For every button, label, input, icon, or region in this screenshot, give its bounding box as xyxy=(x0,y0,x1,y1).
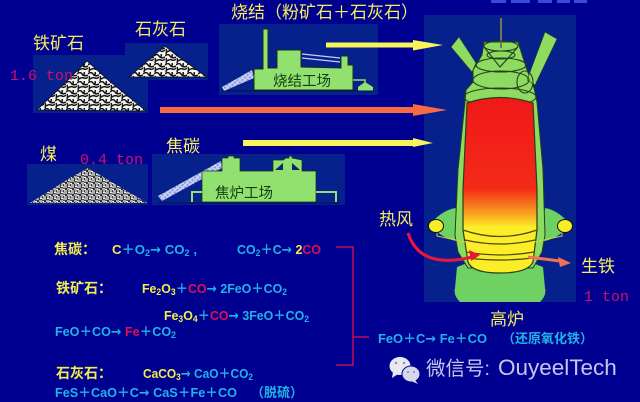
formula: CaCO3: CaO＋CO xyxy=(194,366,254,381)
formula: CO2 + C: 2 xyxy=(256,248,260,258)
left chute xyxy=(451,37,476,72)
heading: limestone reactions: 石灰石： xyxy=(56,365,112,381)
formula: FeO + CO: 2 xyxy=(171,330,176,340)
formula: CaCO3: CaCO xyxy=(143,366,176,381)
formula: CO2 + C: CO xyxy=(237,242,256,257)
bracket connector xyxy=(336,247,369,365)
formula: CO2 + C: ＋C xyxy=(260,242,282,257)
watermark text xyxy=(426,355,617,380)
arrow: coke to furnace xyxy=(243,138,433,147)
formula: coke reactions: , xyxy=(190,242,197,257)
bell outlines xyxy=(464,41,536,106)
formula: Fe3O4: Fe xyxy=(164,308,178,323)
formula: coke reactions: 2 xyxy=(145,248,150,258)
arrow: sinter to furnace xyxy=(326,40,443,50)
furnace hot zone gradient xyxy=(463,98,537,273)
label: limestone: 石灰石 xyxy=(135,20,186,39)
formula: CaCO3: 2 xyxy=(248,372,253,382)
icon: sinter plant building xyxy=(254,29,353,90)
label: pig iron: 生铁 xyxy=(581,257,615,276)
formula: desulfurization: FeS＋CaO＋C→ CaS＋Fe＋CO xyxy=(55,385,237,401)
right bustle ring xyxy=(558,220,572,232)
formula: Fe2O3: 2 xyxy=(156,287,161,297)
formula: Fe3O4: 3 xyxy=(178,314,183,324)
formula: Fe3O4: O xyxy=(183,308,193,323)
formula: Fe2O3: CO→ 2FeO＋CO xyxy=(188,281,286,297)
panel: coke plant xyxy=(152,154,345,205)
icon: coal pile xyxy=(30,168,147,203)
furnace shell xyxy=(455,42,545,268)
formula: Fe2O3: O xyxy=(161,281,171,296)
formula: FeO + CO: FeO＋CO→ Fe＋CO xyxy=(55,324,172,340)
furnace base xyxy=(455,262,545,302)
formula: coke reactions: CO xyxy=(165,242,184,257)
formula: Fe2O3: 3 xyxy=(171,287,176,297)
label: iron ore: 铁矿石 xyxy=(33,34,84,53)
watermark text: OuyeelTech xyxy=(498,355,617,380)
panel: coal xyxy=(27,164,148,205)
label: blast furnace: 高炉 xyxy=(490,310,524,329)
right chute xyxy=(527,32,557,85)
arrow: hot air xyxy=(408,233,472,260)
icon: conveyor xyxy=(158,161,222,201)
cropped title fragment xyxy=(491,0,587,3)
formula: Fe2O3: Fe xyxy=(142,281,156,296)
icon: coke plant building xyxy=(202,156,316,202)
charging rod xyxy=(500,18,502,48)
label: hot air: 热风 xyxy=(379,210,413,229)
arrow head: hot air xyxy=(469,250,480,261)
label: 1.6 ton: 1.6 ton xyxy=(10,68,73,85)
panel: blast furnace xyxy=(424,15,576,302)
note: desulfurization: （脱硫） xyxy=(251,385,303,400)
icon: iron ore pile xyxy=(37,61,146,111)
label: coal: 煤 xyxy=(40,145,57,164)
heading: iron ore reactions: 铁矿石： xyxy=(56,280,112,296)
label: 1 ton: 1 ton xyxy=(584,289,629,306)
hot air bustle left xyxy=(432,208,460,242)
watermark text: 微信号: xyxy=(426,358,490,380)
left bustle ring xyxy=(428,220,444,232)
formula: Fe2O3: 2 xyxy=(282,287,287,297)
arrow head: pig iron xyxy=(558,257,571,267)
formula: coke reactions: → xyxy=(150,243,161,258)
formula: Fe3O4: 4 xyxy=(193,314,198,324)
hot air bustle right xyxy=(541,208,568,242)
heading: coke reactions: 焦碳： xyxy=(54,241,96,257)
formula: Fe2O3: ＋ xyxy=(176,281,188,296)
formula: Fe3O4: 2 xyxy=(304,314,309,324)
formula: Fe3O4: CO→ 3FeO＋CO xyxy=(210,308,308,324)
arrow: ore to furnace xyxy=(160,104,447,116)
panel: limestone xyxy=(125,43,208,80)
formula: FeO reduction: FeO＋C→ Fe＋CO xyxy=(378,331,487,347)
hearth bands xyxy=(463,230,537,260)
icon: conveyor xyxy=(222,70,254,91)
panel: iron ore xyxy=(33,55,148,113)
panel: sinter plant xyxy=(219,24,378,95)
label: coke: 焦碳 xyxy=(166,137,200,156)
arrow: pig iron xyxy=(528,257,560,261)
formula: coke reactions: C＋O xyxy=(112,242,145,257)
label: 0.4 ton: 0.4 ton xyxy=(80,152,143,169)
icon: wechat logo xyxy=(390,357,420,384)
label: coke plant: 焦炉工场 xyxy=(215,185,273,202)
formula: coke reactions: 2 xyxy=(185,248,190,258)
formula: CaCO3: 3 xyxy=(176,372,181,382)
icon: limestone pile xyxy=(129,46,207,77)
formula: CO2 + C: → 2CO xyxy=(282,242,322,258)
formula: Fe3O4: ＋ xyxy=(198,308,210,323)
label: sinter plant: 烧结工场 xyxy=(273,73,331,90)
note: reduction of iron oxide: （还原氧化铁） xyxy=(502,331,593,346)
tuyere pipes xyxy=(437,227,562,242)
formula: CaCO3: → xyxy=(181,367,191,382)
heading: sinter: 烧结（粉矿石＋石灰石） xyxy=(231,3,418,22)
